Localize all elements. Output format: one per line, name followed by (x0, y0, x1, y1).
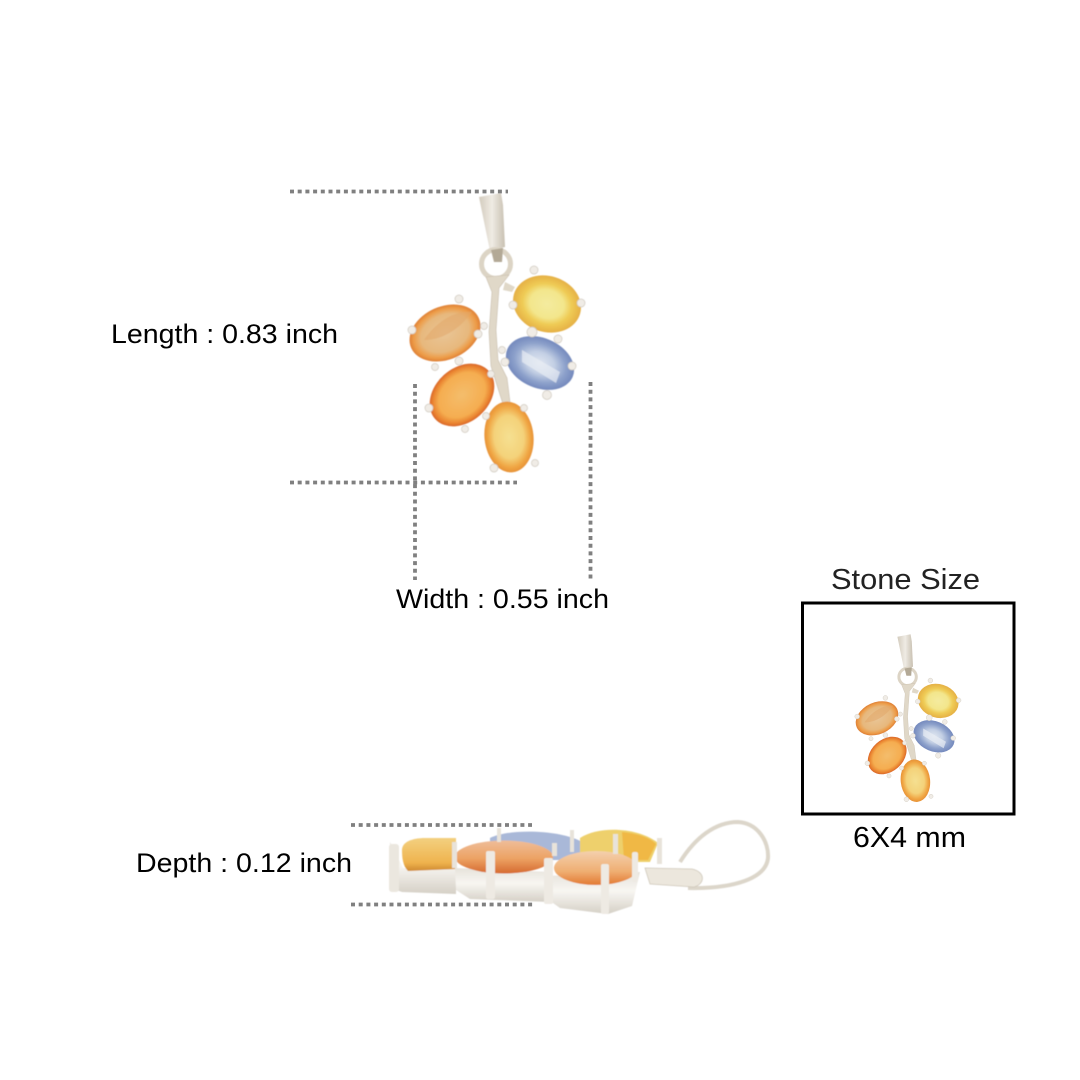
middle setting (455, 868, 552, 902)
width measure guides (415, 382, 590, 580)
bail loop (680, 822, 768, 888)
length measure guides (290, 192, 517, 482)
left setting (390, 842, 456, 894)
depth measure guides (351, 825, 533, 904)
pendant photo: side view (389, 822, 768, 914)
length label: Length : 0.83 inch (111, 319, 338, 349)
stone size value: 6X4 mm (853, 822, 966, 854)
width label: Width : 0.55 inch (396, 584, 609, 614)
pendant photo: front view (400, 193, 588, 475)
depth label: Depth : 0.12 inch (136, 848, 352, 878)
right setting (546, 872, 640, 914)
stone size panel (802, 603, 1014, 814)
pendant photo: scaled stone size view (850, 634, 963, 803)
prongs (452, 828, 662, 868)
back stones (490, 832, 582, 860)
stone size heading: Stone Size (831, 564, 980, 596)
